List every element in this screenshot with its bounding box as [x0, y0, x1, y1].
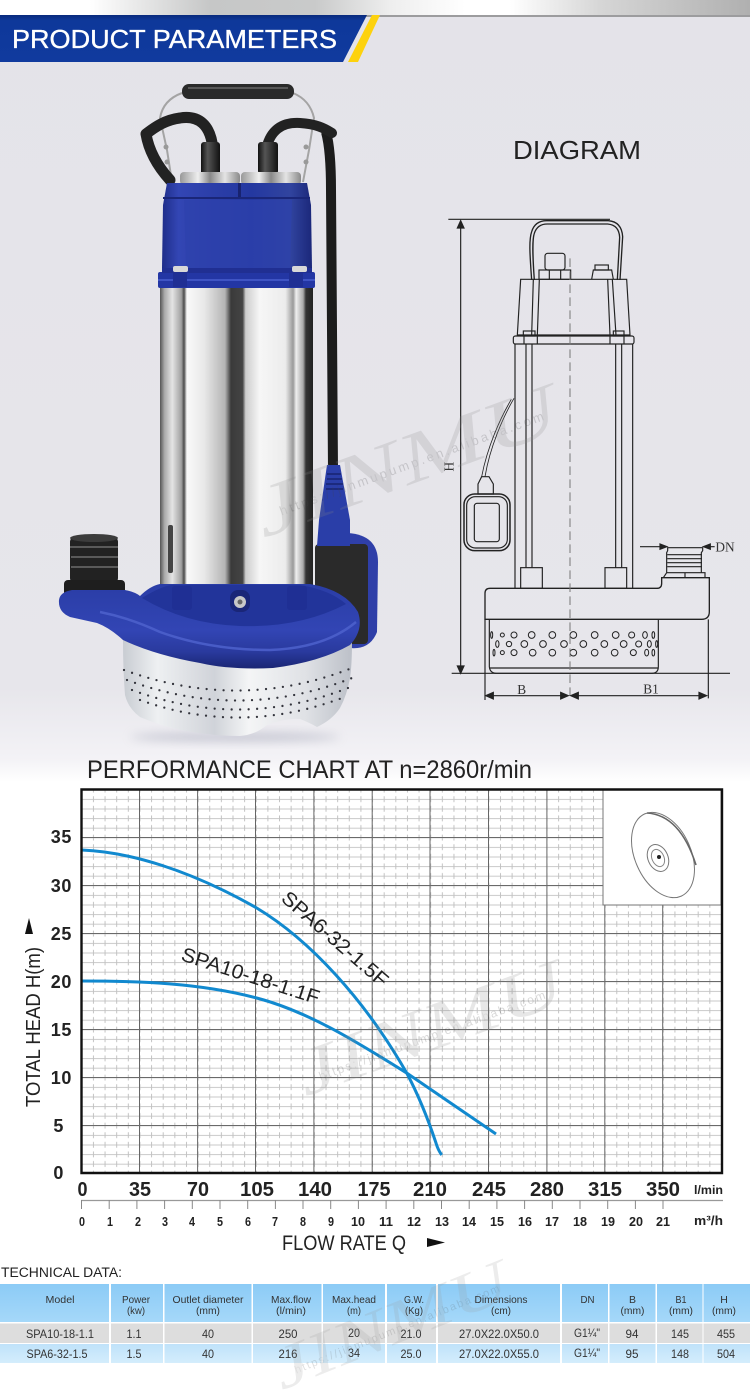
table row: SPA6-32-1.5: 216 [278, 1349, 298, 1361]
perforated basket [123, 640, 352, 736]
flow rate l/min axis: 210 [413, 1179, 447, 1201]
y axis numbers: 20 [51, 972, 72, 992]
y axis title: TOTAL HEAD H(m) [23, 947, 45, 1107]
table header row: H [720, 1294, 728, 1306]
technical line drawing [441, 219, 735, 700]
flow rate m3/h axis: 6 [245, 1215, 251, 1229]
table row: SPA10-18-1.1: G1¼" [574, 1328, 600, 1340]
power cord [326, 132, 333, 470]
table row: SPA6-32-1.5: 504 [717, 1349, 736, 1361]
watermark over table: https://jinmupump.en.alibaba.com [293, 1283, 501, 1376]
flow rate m3/h axis: 7 [272, 1215, 278, 1229]
right cable [266, 123, 332, 150]
flow rate m3/h axis: 8 [300, 1215, 306, 1229]
watermark over table: JINMU [262, 1246, 523, 1399]
flow rate l/min axis: 70 [187, 1179, 209, 1201]
flow rate l/min axis: 105 [240, 1179, 274, 1201]
diagram heading: DIAGRAM [513, 135, 641, 165]
technical data table [0, 1284, 750, 1363]
flow rate m3/h axis: 21 [656, 1215, 670, 1229]
motor cap outline [517, 279, 630, 335]
terminals [539, 253, 613, 279]
flow rate m3/h axis [79, 1200, 723, 1229]
flange and bolts [513, 331, 634, 344]
flow rate m3/h axis: 11 [379, 1215, 393, 1229]
strainer [489, 619, 658, 673]
table header row: (mm) [669, 1305, 693, 1317]
flow rate m3/h axis: 1 [107, 1215, 113, 1229]
impeller inset [603, 790, 721, 907]
curve label SPA6: SPA6-32-1.5F [277, 887, 392, 992]
flow rate m3/h axis: 18 [573, 1215, 587, 1229]
table header row: Outlet diameter [172, 1294, 244, 1306]
table row: SPA10-18-1.1: SPA10-18-1.1 [26, 1329, 94, 1341]
table header row: (kw) [127, 1305, 145, 1317]
table row: SPA6-32-1.5: 34 [348, 1348, 361, 1360]
DN dimension [640, 539, 735, 554]
y axis numbers: 5 [53, 1116, 64, 1136]
x axis title: FLOW RATE Q [282, 1232, 406, 1255]
y axis numbers: 15 [51, 1020, 72, 1040]
base width dimensions: B1 [643, 681, 659, 696]
table row: SPA6-32-1.5: SPA6-32-1.5 [26, 1349, 88, 1361]
table header row: (mm) [620, 1305, 644, 1317]
table header row: (mm) [712, 1305, 736, 1317]
flow rate l/min axis: 175 [358, 1179, 390, 1201]
flow rate m3/h axis: 4 [189, 1215, 195, 1229]
base outline [485, 578, 709, 619]
flow rate m3/h axis: 16 [518, 1215, 532, 1229]
grid [81, 789, 722, 1173]
motor cap [158, 183, 315, 288]
table row: SPA10-18-1.1: 20 [348, 1328, 360, 1340]
table row: SPA6-32-1.5 [0, 1344, 750, 1363]
table header row: (mm) [196, 1305, 220, 1317]
watermark over chart: JINMU [285, 944, 579, 1111]
top metallic strip [0, 0, 750, 17]
flow rate l/min axis: 350 [646, 1179, 680, 1201]
floor shadow [130, 733, 340, 741]
outlet connector [64, 534, 125, 596]
table header row: B1 [676, 1294, 687, 1306]
y axis numbers: 30 [51, 876, 72, 896]
flow rate l/min axis: 140 [298, 1179, 332, 1201]
flow rate m3/h axis: 5 [217, 1215, 223, 1229]
watermark over product area: JINMU [241, 367, 575, 553]
table header row: B [629, 1294, 636, 1306]
table header row: Model [46, 1294, 74, 1306]
y axis numbers: 35 [51, 827, 72, 847]
curve: SPA6-32-1.5F [82, 850, 442, 1155]
y axis numbers [51, 827, 72, 1183]
feet [521, 568, 627, 588]
top plate [180, 172, 301, 185]
table header row: Max.flow [271, 1294, 311, 1306]
table row: SPA10-18-1.1: 94 [626, 1329, 639, 1341]
flow rate m3/h axis: 9 [328, 1215, 334, 1229]
table header row: (m) [347, 1305, 361, 1317]
flow rate m3/h axis: 19 [601, 1215, 615, 1229]
float switch [315, 465, 378, 648]
table row: SPA6-32-1.5: G1¼" [574, 1348, 600, 1360]
table row: SPA10-18-1.1: 145 [671, 1329, 689, 1341]
watermark over product area: https://jinmupump.en.alibaba.com [277, 409, 546, 518]
table row: SPA6-32-1.5: 27.0X22.0X55.0 [459, 1349, 539, 1361]
y axis numbers: 10 [51, 1068, 72, 1088]
flow rate m3/h axis: m³/h [694, 1214, 723, 1228]
plot area [81, 789, 722, 1173]
table header row [0, 1284, 750, 1322]
base width dimensions [485, 619, 708, 700]
flow rate m3/h axis: 15 [490, 1215, 504, 1229]
body outline [515, 344, 633, 588]
table row: SPA10-18-1.1: 40 [202, 1329, 214, 1341]
float switch outline [464, 398, 514, 551]
cable glands [201, 142, 278, 184]
flow rate m3/h axis: 20 [629, 1215, 643, 1229]
performance chart [23, 789, 723, 1255]
table header row: G.W. [404, 1294, 424, 1306]
watermark over table [262, 1246, 523, 1399]
heading banner: product parameters: PRODUCT PARAMETERS [12, 24, 337, 54]
overall height dimension H [441, 219, 730, 673]
handle [160, 84, 314, 182]
table header row: (l/min) [276, 1305, 306, 1317]
table header row: Dimensions [474, 1294, 528, 1306]
left cable [146, 117, 213, 180]
DN dimension: DN [715, 539, 735, 554]
curve label SPA10: SPA10-18-1.1F [178, 944, 322, 1009]
flow rate m3/h axis: 0 [79, 1215, 85, 1229]
watermark over chart: https://jinmupump.en.alibaba.com [317, 988, 547, 1083]
flow rate l/min axis: 245 [472, 1179, 506, 1201]
table row: SPA10-18-1.1 [0, 1324, 750, 1343]
watermark over product area [241, 367, 575, 553]
outlet thread [663, 548, 705, 578]
flow rate l/min axis: 315 [588, 1179, 622, 1201]
centre line [568, 258, 571, 700]
flow rate m3/h axis: 10 [351, 1215, 365, 1229]
flow rate m3/h axis: 14 [462, 1215, 476, 1229]
table row: SPA10-18-1.1: 250 [278, 1329, 298, 1341]
level slot on steel body [168, 525, 173, 573]
table header row: (cm) [491, 1305, 511, 1317]
heading banner: product parameters [0, 15, 380, 62]
base width dimensions: B [517, 682, 526, 697]
steel body [160, 288, 313, 588]
table row: SPA6-32-1.5: 95 [626, 1349, 638, 1361]
overall height dimension H: H [441, 461, 456, 471]
flow rate m3/h axis: 2 [135, 1215, 141, 1229]
flow rate m3/h axis: 3 [162, 1215, 168, 1229]
volute base [59, 584, 360, 668]
pump photo illustration [59, 84, 378, 741]
table row: SPA6-32-1.5: 40 [202, 1349, 214, 1361]
flow rate m3/h axis: 17 [545, 1215, 559, 1229]
y axis numbers: 0 [53, 1163, 64, 1183]
curve: SPA10-18-1.1F [81, 981, 496, 1134]
flow rate l/min axis [78, 1179, 723, 1201]
table row: SPA10-18-1.1: 27.0X22.0X50.0 [459, 1329, 539, 1341]
table row: SPA10-18-1.1: 21.0 [400, 1329, 422, 1341]
flow rate m3/h axis: 13 [435, 1215, 449, 1229]
photo background [0, 0, 750, 782]
table row: SPA10-18-1.1: 455 [717, 1329, 735, 1341]
chart frame [82, 790, 722, 1173]
flow rate l/min axis: l/min [694, 1183, 723, 1197]
table row: SPA6-32-1.5: 25.0 [400, 1349, 422, 1361]
table header row: (Kg) [405, 1305, 423, 1317]
table header row: DN [580, 1294, 594, 1306]
handle outline [530, 221, 623, 280]
flow rate l/min axis: 35 [129, 1179, 151, 1201]
y axis numbers: 25 [51, 924, 72, 944]
table row: SPA6-32-1.5: 1.5 [126, 1349, 142, 1361]
table row: SPA10-18-1.1: 1.1 [126, 1329, 142, 1341]
flow rate m3/h axis: 12 [407, 1215, 421, 1229]
technical data heading: TECHNICAL DATA: [1, 1265, 122, 1280]
watermark over chart [285, 944, 579, 1111]
table row: SPA6-32-1.5: 148 [671, 1349, 689, 1361]
flow rate l/min axis: 0 [78, 1179, 88, 1201]
table header row: Max.head [332, 1294, 376, 1306]
flow rate l/min axis: 280 [530, 1179, 564, 1201]
table header row: Power [122, 1294, 150, 1306]
performance chart heading: PERFORMANCE CHART AT n=2860r/min [87, 756, 532, 784]
